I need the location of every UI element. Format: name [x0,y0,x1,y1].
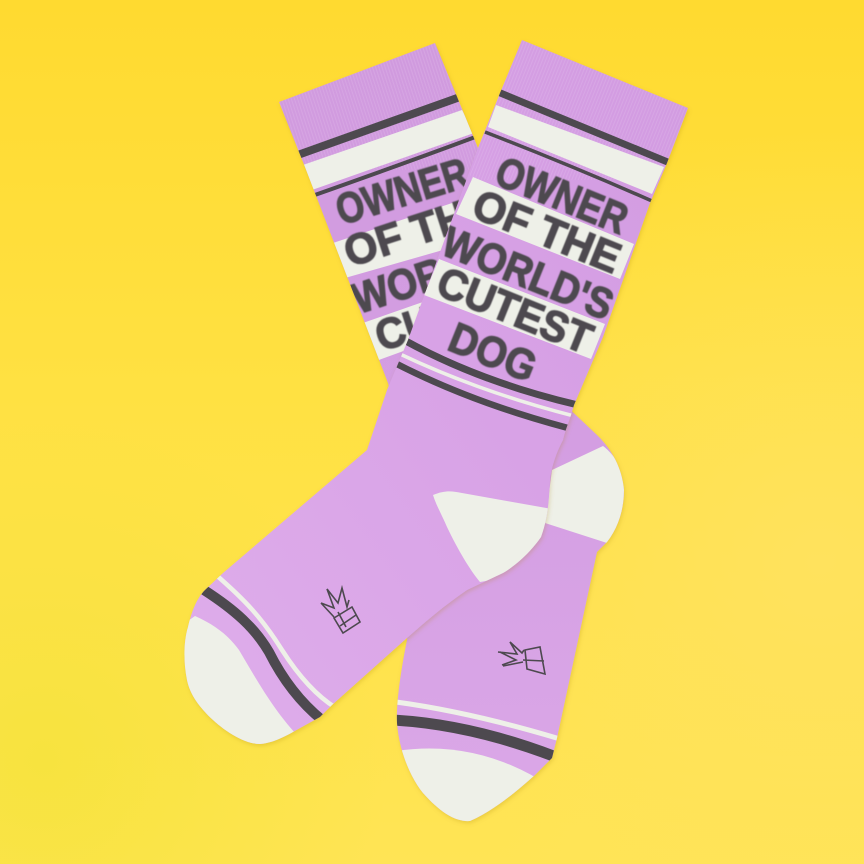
back sock toe stripes [392,702,560,757]
back sock slogan text: CUTEST [369,265,539,361]
back sock slogan text: OF THE [338,183,500,277]
front sock slogan text: WORLD'S [435,218,620,330]
front sock slogan text: DOG [442,314,543,392]
back sock slogan text: OWNER [330,149,474,235]
back sock [279,43,626,824]
front sock toe stripes [204,574,336,720]
back sock slogan text: WORLD'S [346,222,532,324]
front sock slogan text: OF THE [466,181,627,283]
back sock logo [498,642,545,674]
front sock heel [433,491,552,582]
back sock text bands [334,202,456,360]
front sock logo [321,588,360,633]
front sock ankle stripes [393,340,578,428]
back sock body [279,43,624,822]
front sock [170,20,700,760]
front sock body [170,20,700,760]
front sock text bands [424,177,634,359]
front sock slogan text [438,158,628,380]
front sock slogan text: OWNER [489,148,635,244]
back sock slogan text [336,158,466,350]
front sock slogan text: CUTEST [430,258,599,364]
front sock cuff stripes [485,92,670,201]
back sock heel [545,446,624,543]
front sock toe [184,616,294,744]
back sock toe [402,748,534,822]
back sock cuff stripes [295,97,478,196]
